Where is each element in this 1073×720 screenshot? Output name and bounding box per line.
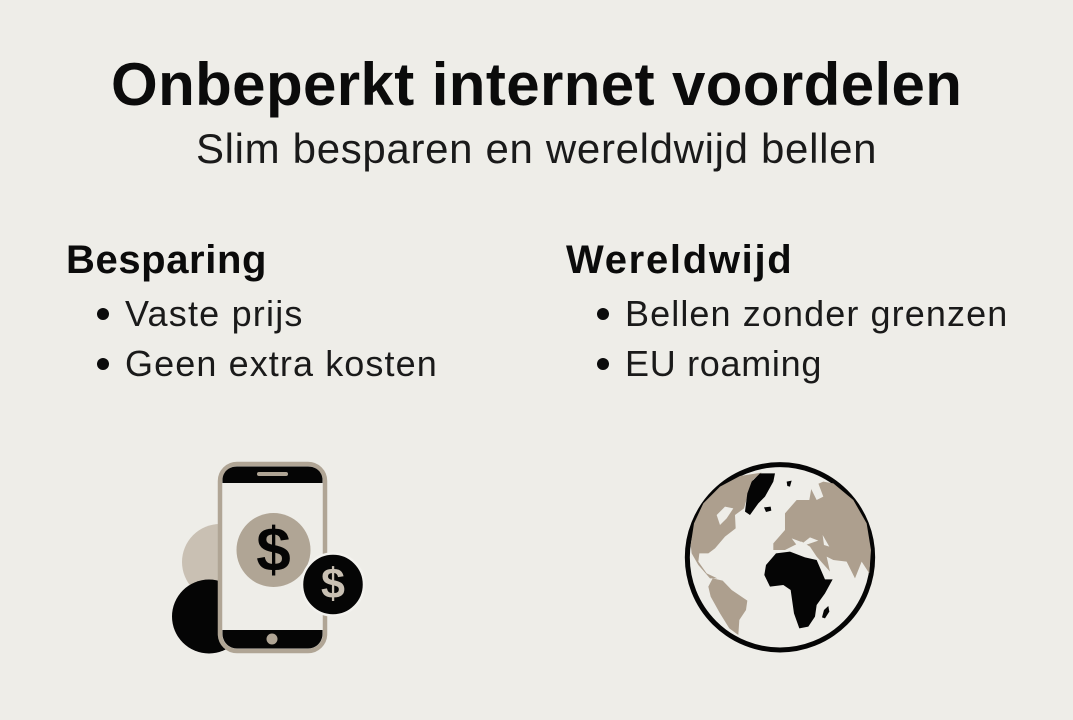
bullet list: wereldwijd — [597, 293, 1008, 384]
greenland — [745, 473, 775, 515]
south america — [708, 578, 747, 635]
bullet list: wereldwijd: Bellen zonder grenzen — [625, 293, 1008, 334]
africa — [764, 552, 833, 628]
bullet list: wereldwijd: EU roaming — [625, 343, 822, 384]
panel: besparing — [66, 238, 438, 384]
icon: phone with dollar coins: $ — [321, 560, 345, 608]
eurasia — [773, 482, 871, 578]
madagascar — [822, 606, 829, 618]
bullet list: besparing — [97, 293, 438, 384]
subtitle: Slim besparen en wereldwijd bellen — [196, 125, 877, 172]
bullet list: besparing: Vaste prijs — [125, 293, 304, 334]
icon: phone with dollar coins — [172, 464, 364, 654]
title: Onbeperkt internet voordelen — [111, 51, 962, 118]
north america — [691, 473, 762, 578]
heading: wereldwijd: Wereldwijd — [566, 238, 793, 282]
iceland — [764, 507, 771, 512]
panel: wereldwijd — [566, 238, 1008, 384]
heading: besparing: Besparing — [66, 238, 267, 282]
icon: phone with dollar coins: $ — [256, 516, 291, 585]
svalbard — [787, 481, 792, 487]
bullet list: besparing: Geen extra kosten — [125, 343, 438, 384]
icon: globe — [687, 465, 873, 650]
